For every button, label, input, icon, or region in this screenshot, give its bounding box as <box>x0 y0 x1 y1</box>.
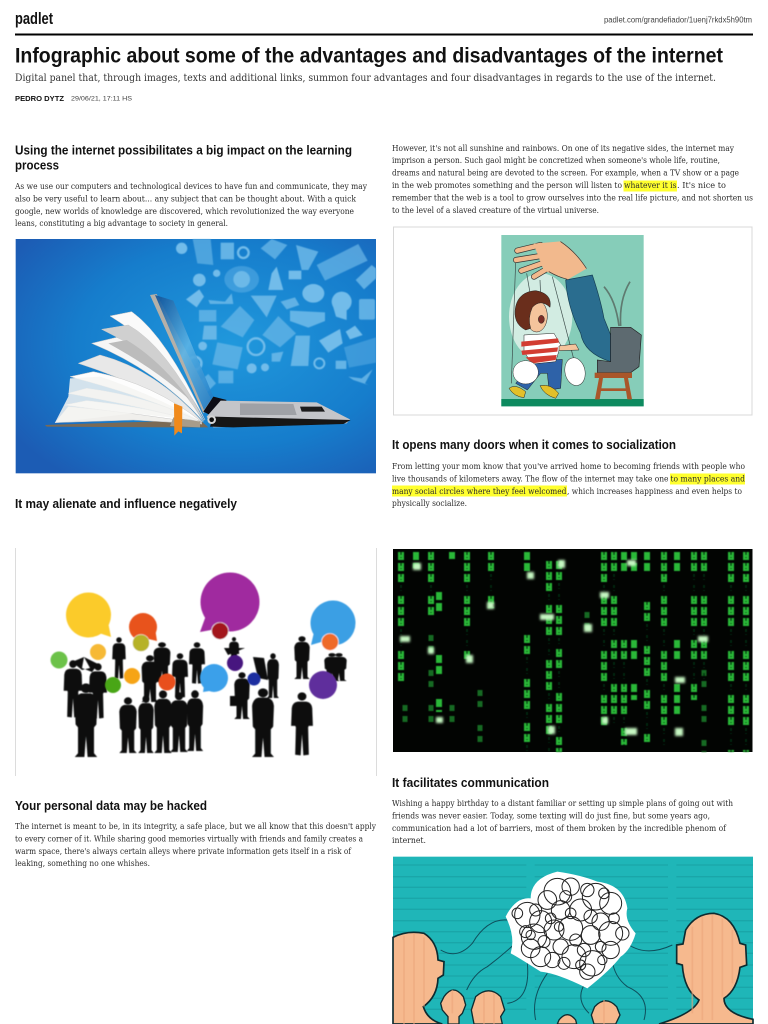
tv antenna <box>604 282 630 326</box>
heading: socialization: It opens many doors when it comes to socialization <box>392 438 676 452</box>
heading: alienate: It may alienate and influence negatively <box>15 497 237 511</box>
padlet url: padlet.com/grandefiador/1uenj7rkdx5h90tm <box>604 16 752 24</box>
bright glyphs <box>400 560 708 736</box>
subtitle: Digital panel that, through images, texts and additional links, summon four advantages and four disadvantages in regards to the use of the internet. <box>15 73 716 84</box>
stool <box>595 373 632 399</box>
open book pages <box>45 420 208 427</box>
communication text block: Wishing a happy birthday to a distant familiar or setting up simple plans of going out with <box>392 799 733 808</box>
boy <box>509 291 579 398</box>
communication text block: communication had a lot of barriers, most of them broken by the incredible phenom of <box>392 824 727 833</box>
learning text block: leans, constituting a big advantage to society in general. <box>15 219 228 228</box>
sleeve <box>566 275 611 362</box>
padlet logo: padlet <box>15 10 53 28</box>
socialization text block: live thousands of kilometers away. The flow of the internet may take one <box>392 474 669 484</box>
socialization text block: physically socialize. <box>392 499 467 508</box>
socialization text block: many social circles where they feel welcomed <box>392 487 566 496</box>
hacked text block: warm space, there's always certain alleys where private information gets itself in a risk of <box>15 847 352 856</box>
panel: learning heading <box>15 144 352 172</box>
image: matrix code rain <box>393 549 752 752</box>
image: heads and tangled thoughts <box>393 857 753 1024</box>
laptop base <box>207 401 350 427</box>
image: book and laptop <box>16 239 376 473</box>
image: people with speech bubbles <box>16 548 376 776</box>
head stripes <box>404 915 732 1024</box>
right text block: negative side: imprison a person. Such gaol might be concretized when someone's whole life, routine, <box>392 156 720 165</box>
panel: learning heading: Using the internet possibilitates a big impact on the learning <box>15 144 352 158</box>
author and date: PEDRO DYTZ <box>15 94 64 103</box>
panel: learning heading: process <box>15 158 59 172</box>
right text block: negative side <box>392 144 753 215</box>
socialization text block: From letting your mom know that you've arrived home to becoming friends with people who <box>392 462 745 471</box>
speech bubbles <box>50 572 356 699</box>
bags <box>513 361 538 384</box>
right text block: negative side: remember that the web is a tool to grow ourselves into the real life picture, and not shorten us <box>392 194 753 202</box>
laptop screen <box>45 294 351 436</box>
large right head <box>659 913 753 1024</box>
icons: floating knowledge symbols <box>176 239 376 393</box>
learning text block: google, new worlds of knowledge are discovered, which revolutionized the way everyone <box>15 207 354 216</box>
communication text block: friends was never easier. Today, some texting will do just fine, but some years ago, <box>392 812 710 820</box>
hacked text block: to every corner of it. While sharing good memories virtually with friends and family creates a <box>15 834 363 844</box>
right text block: negative side: in the web promotes something and the person will listen to <box>392 181 622 190</box>
socialization text block: , which increases happiness and even helps to <box>567 487 742 496</box>
communication text block <box>392 799 733 845</box>
large left head <box>393 932 444 1024</box>
television <box>597 327 641 373</box>
right text block: negative side: whatever it is <box>624 181 676 190</box>
hacked text block: leaking, something no one whishes. <box>15 859 150 868</box>
learning text block: also be very useful to learn about... any subject that can be thought about. With a quick <box>15 194 356 204</box>
learning text block: As we use our computers and technological devices to have fun and communicate, they may <box>14 182 367 191</box>
strings <box>511 262 574 383</box>
communication text block: internet. <box>392 836 426 845</box>
learning text block <box>14 182 367 228</box>
image: puppet and television <box>394 227 752 415</box>
code columns <box>401 552 746 752</box>
thought cloud <box>506 872 636 988</box>
tangled scribble <box>512 878 629 979</box>
small heads <box>441 990 620 1024</box>
connecting lines <box>441 920 672 1020</box>
highlight: social circles <box>392 486 567 496</box>
silhouettes <box>64 636 347 757</box>
author and date: 29/06/21, 17:11 HS <box>71 96 133 102</box>
hacked text block <box>15 822 376 868</box>
right text block: negative side: However, it's not all sunshine and rainbows. On one of its negative sides, the internet may <box>392 144 734 153</box>
socialization text block: to many places and <box>670 474 745 484</box>
hacked text block: The internet is meant to be, in its integrity, a safe place, but we all know that this doesn't apply <box>15 822 376 831</box>
right text block: negative side: to the level of a slaved creature of the virtual universe. <box>392 206 599 215</box>
bookmark <box>174 403 182 436</box>
highlight: whatever it is <box>624 180 677 192</box>
author and date <box>15 94 133 103</box>
socialization text block <box>392 462 745 508</box>
right text block: negative side: . It's nice to <box>677 181 726 190</box>
header: padlet logo and url <box>15 10 752 28</box>
heading: communication: It facilitates communication <box>392 776 549 790</box>
right text block: negative side: dreams and natural being are devoted to the screen. For example, when a TV show or a page <box>392 168 739 178</box>
hand <box>516 242 586 279</box>
glyph cut-outs <box>401 552 746 752</box>
heading: hacked: Your personal data may be hacked <box>15 799 207 813</box>
highlight: to many places <box>670 474 745 484</box>
